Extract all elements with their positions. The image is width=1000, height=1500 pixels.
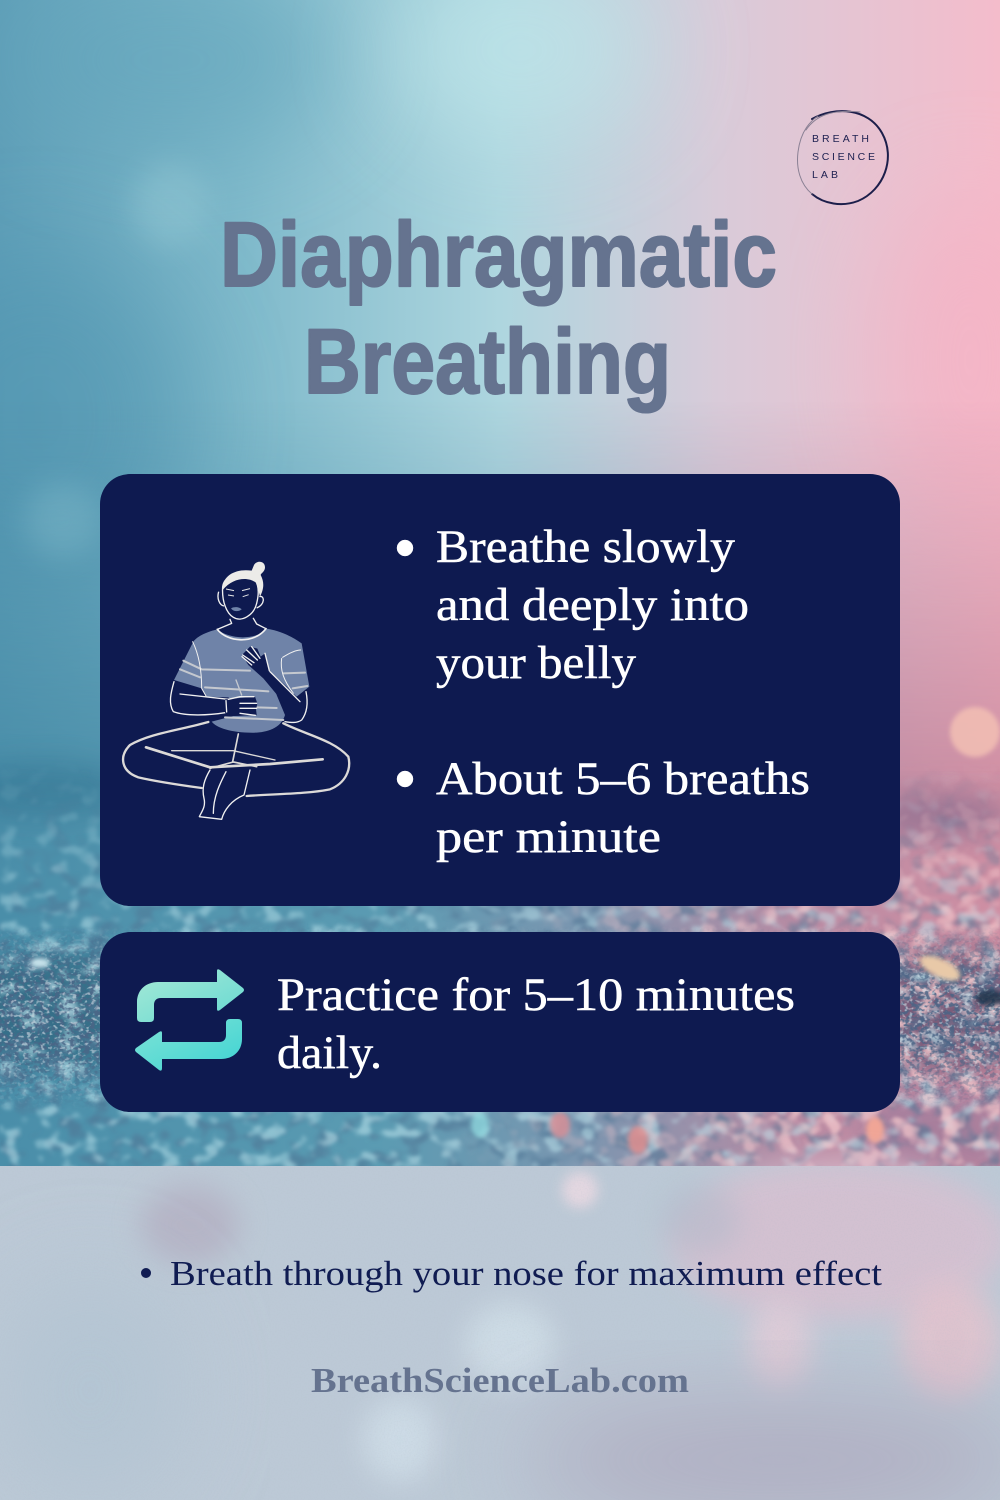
bullet list: Breathe slowly	[436, 521, 736, 573]
bottom pale translucent band	[0, 1160, 1000, 1500]
bullet list	[397, 521, 810, 863]
practice text: daily.	[277, 1027, 382, 1079]
body outlines	[170, 618, 307, 722]
website: BreathScienceLab.com	[311, 1361, 689, 1400]
practice text	[277, 969, 795, 1079]
panel: breathing instructions	[100, 474, 900, 906]
tip bullet: Breath through your nose for maximum effect	[170, 1254, 882, 1293]
logo: Breath Science Lab	[798, 111, 888, 204]
panel: daily practice	[100, 932, 900, 1112]
logo text	[812, 133, 875, 181]
illustration: seated person with hands on chest and belly	[122, 562, 350, 820]
bullet list: and deeply into	[436, 579, 749, 631]
logo text: BREATH	[812, 133, 869, 145]
bullet list: About 5–6 breaths	[436, 753, 810, 805]
hand on belly	[225, 697, 257, 716]
hand on chest	[242, 647, 301, 708]
bullet list: your belly	[436, 637, 637, 689]
shirt	[174, 629, 309, 733]
legs	[123, 722, 349, 819]
title: Breathing	[304, 311, 671, 413]
logo text: SCIENCE	[812, 151, 875, 163]
practice text: Practice for 5–10 minutes	[277, 969, 795, 1021]
title	[220, 204, 777, 413]
icon: repeat arrows	[135, 969, 244, 1071]
head	[218, 562, 265, 619]
title: Diaphragmatic	[220, 204, 777, 306]
bullet list: per minute	[436, 811, 661, 863]
shirt stripes	[180, 661, 307, 720]
background: blurred teal-to-pink bokeh photo	[0, 0, 1000, 1166]
logo ring	[798, 111, 888, 204]
logo text: LAB	[812, 169, 838, 181]
